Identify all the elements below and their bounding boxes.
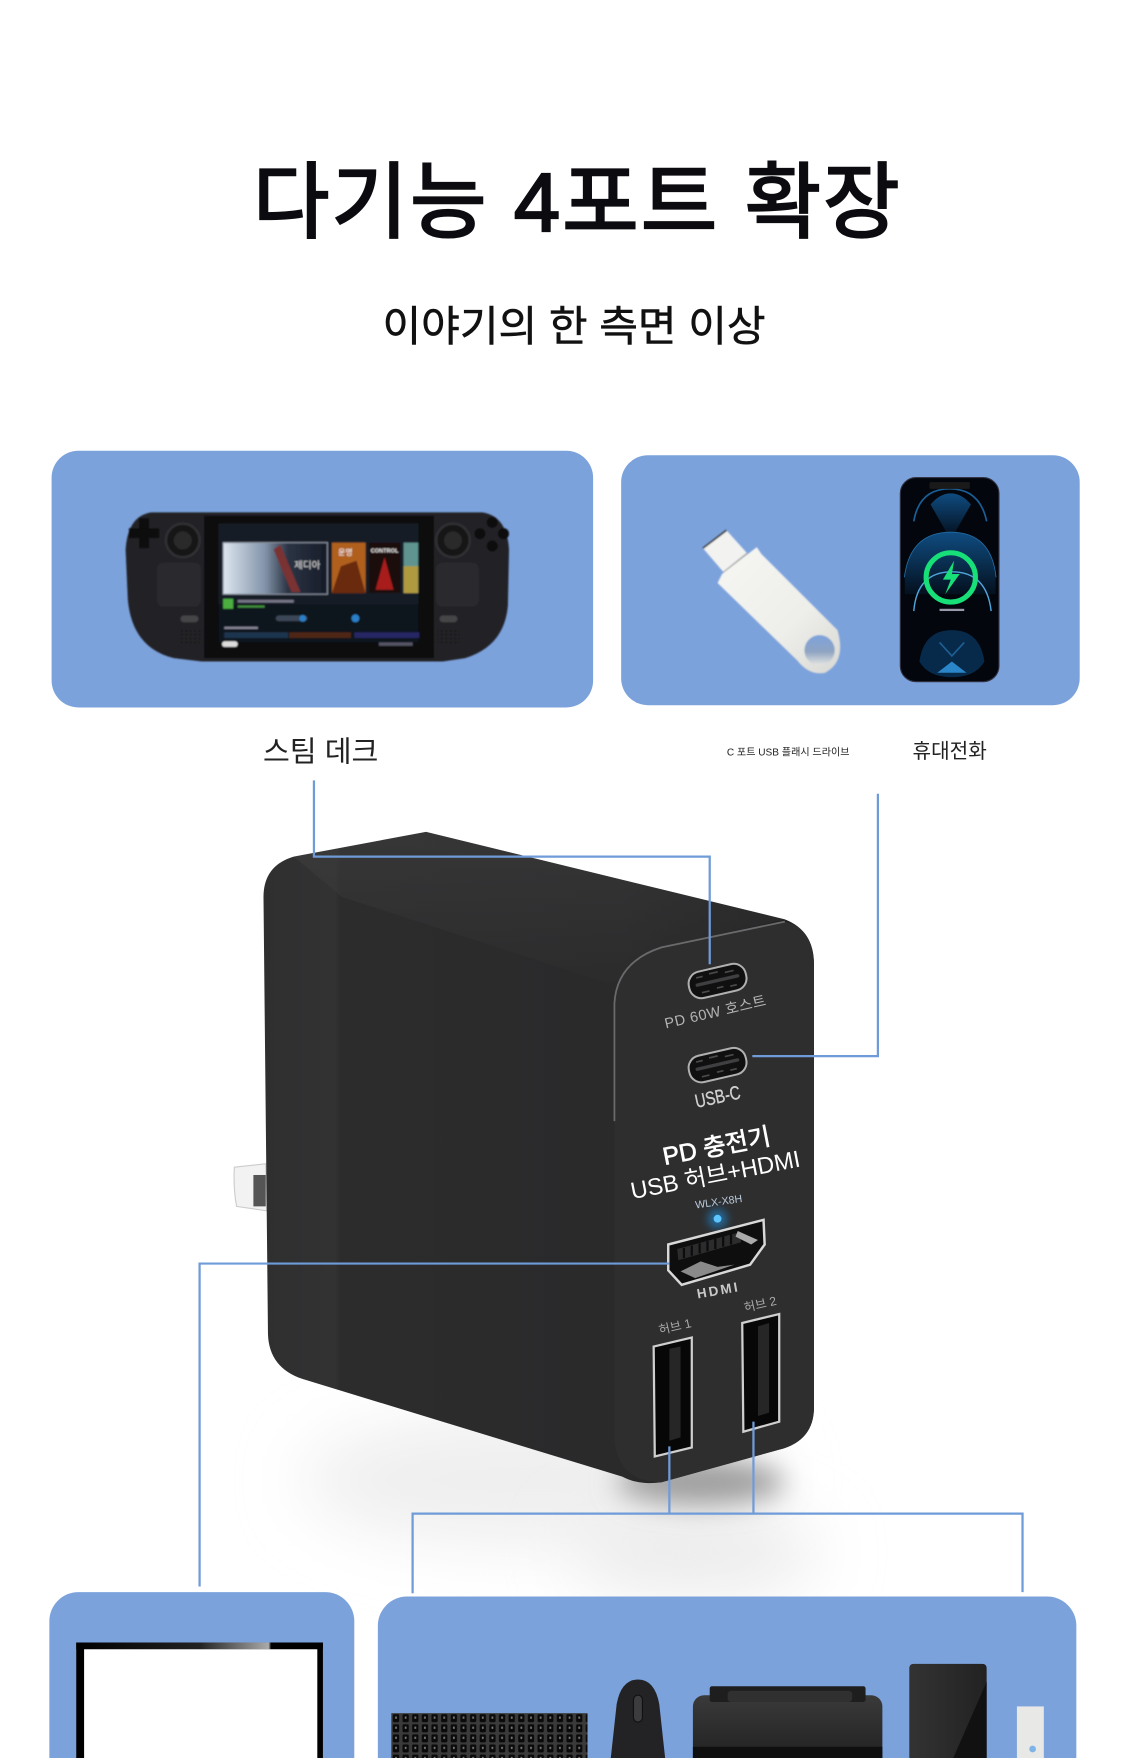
label: steam deck: 스팀 데크 — [263, 735, 378, 768]
port: usb-c 2 — [686, 1045, 749, 1085]
icon: steam deck console: CONTROL — [371, 549, 399, 555]
panel: usb drive and phone — [621, 455, 1080, 705]
icon: steam deck console — [126, 512, 509, 661]
label: model: WLX-X8H — [694, 1193, 743, 1211]
port: usb-a hub 1 — [654, 1338, 692, 1456]
icon: mouse — [610, 1680, 666, 1758]
connector: peripherals to hubs — [413, 1422, 1023, 1593]
plug prong — [234, 1164, 267, 1211]
icon: steam deck console: 운명 — [338, 547, 353, 557]
label: pd 60w: PD 60W 호스트 — [663, 993, 768, 1032]
label: phone: 휴대전화 — [913, 740, 987, 763]
port: usb-c 1 — [686, 961, 749, 1001]
icon: steam deck console: 제디아 — [294, 560, 321, 571]
label: hub 2: 허브 2 — [743, 1294, 778, 1315]
label: usb hub hdmi: USB 허브+HDMI — [628, 1146, 802, 1204]
charger body — [263, 832, 814, 1483]
charger — [234, 832, 814, 1483]
connector: phone to usb-c port — [752, 794, 878, 1056]
icon: usb-c flash drive — [703, 530, 840, 673]
subtitle: 이야기의 한 측면 이상 — [383, 303, 766, 350]
port: usb-a hub 2 — [742, 1314, 779, 1432]
label: usb-c: USB-C — [693, 1083, 743, 1113]
label: hdmi: HDMI — [696, 1279, 741, 1301]
connector: steam deck to pd port — [314, 780, 710, 964]
port: hdmi — [668, 1220, 765, 1285]
icon: keyboard — [391, 1713, 588, 1758]
label: usb-c flash drive: C 포트 USB 플래시 드라이브 — [727, 747, 850, 759]
charger floor shadow — [303, 1413, 818, 1598]
title: 다기능 4포트 확장 — [253, 156, 902, 249]
icon: monitor — [76, 1643, 323, 1758]
icon: phone charging — [900, 478, 999, 682]
label: hub 1: 허브 1 — [657, 1316, 693, 1337]
icon: printer — [693, 1686, 882, 1758]
charger front face — [614, 922, 814, 1482]
panel: peripherals — [378, 1597, 1076, 1758]
connector: monitor to hdmi — [200, 1264, 669, 1586]
label: pd charger: PD 충전기 — [660, 1123, 773, 1171]
icon: tower drive — [909, 1664, 987, 1758]
panel: monitor — [49, 1592, 354, 1758]
panel: steam deck — [52, 451, 593, 707]
indicator led — [707, 1209, 728, 1229]
icon: usb stick — [1017, 1706, 1044, 1758]
